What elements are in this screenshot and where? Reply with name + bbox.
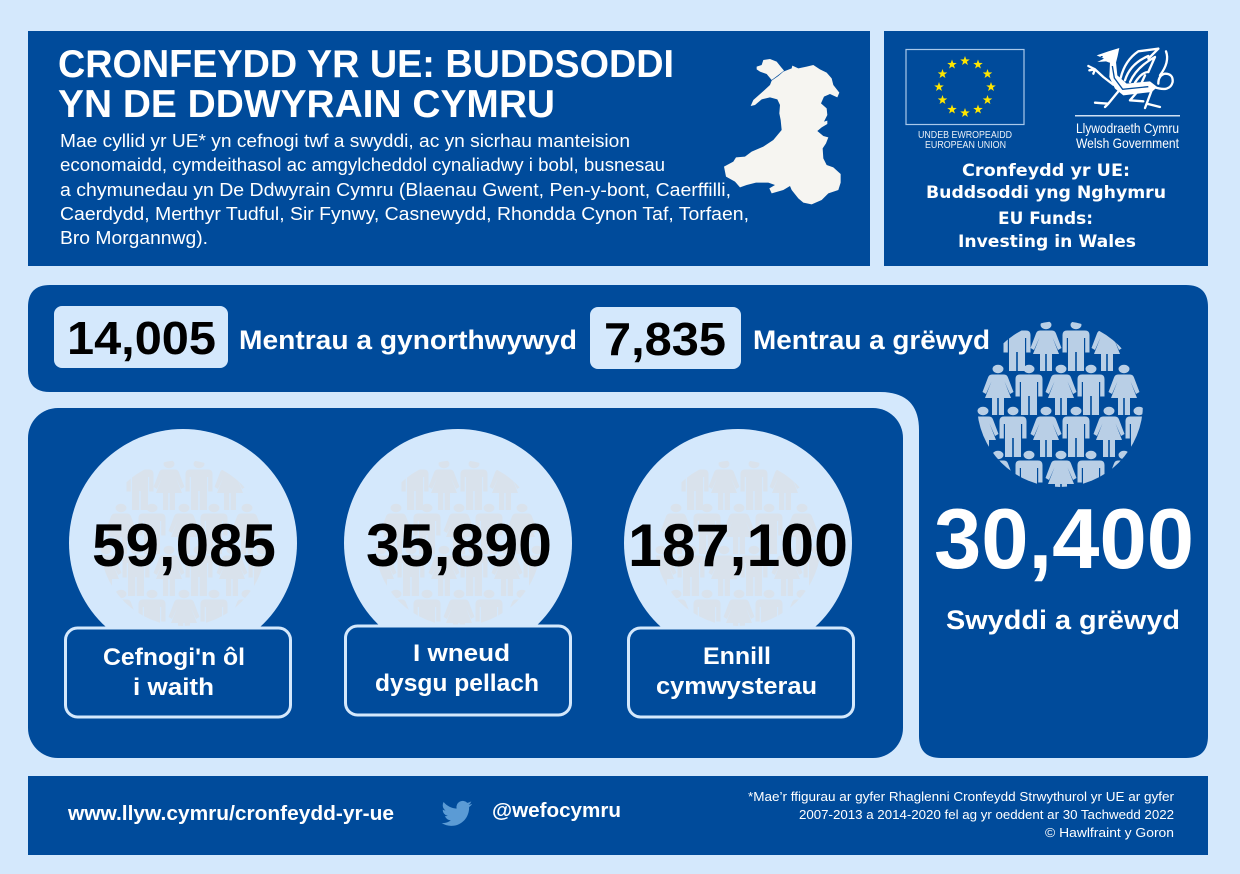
stat: jobs created: 30,400 — [934, 492, 1194, 587]
stat: jobs created — [934, 492, 1194, 635]
programme name: Buddsoddi yng Nghymru — [926, 183, 1166, 202]
Twitter handle: @wefocymru — [492, 800, 621, 822]
stat: gaining qualifications: Ennill — [703, 643, 771, 670]
website link: www.llyw.cymru/cronfeydd-yr-ue — [67, 803, 394, 825]
panel: header — [28, 31, 870, 266]
title — [58, 43, 674, 126]
title: CRONFEYDD YR UE: BUDDSODDI — [58, 43, 674, 86]
divider line and Welsh Government label: Llywodraeth Cymru — [1076, 120, 1179, 136]
divider line and Welsh Government label — [1075, 115, 1180, 151]
stat: further learning — [344, 429, 572, 715]
stat: enterprises supported — [54, 306, 577, 368]
panel: enterprises and jobs created — [28, 285, 1208, 758]
stat: back to work: i waith — [133, 674, 214, 701]
icon: Welsh dragon — [1088, 48, 1173, 108]
divider line and Welsh Government label: Welsh Government — [1076, 135, 1179, 151]
intro text: a chymunedau yn De Ddwyrain Cymru (Blaenau Gwent, Pen-y-bont, Caerffilli, — [60, 180, 731, 200]
programme name: Investing in Wales — [958, 232, 1136, 251]
stat: further learning: I wneud — [413, 640, 510, 667]
programme name — [926, 161, 1166, 251]
programme name: Cronfeydd yr UE: — [962, 161, 1130, 180]
stat: enterprises created: 7,835 — [604, 313, 726, 365]
footnote — [748, 789, 1175, 840]
intro text: Caerdydd, Merthyr Tudful, Sir Fynwy, Casnewydd, Rhondda Cynon Taf, Torfaen, — [60, 204, 749, 224]
panel: participants — [28, 408, 903, 758]
EU label — [918, 130, 1012, 151]
stat: enterprises supported: Mentrau a gynorthwywyd — [239, 325, 577, 355]
intro text — [60, 131, 749, 248]
icon: people circle — [978, 322, 1143, 487]
stat: jobs created: Swyddi a grëwyd — [946, 605, 1180, 635]
stat: back to work: 59,085 — [92, 512, 276, 579]
stat: gaining qualifications: cymwysterau — [656, 673, 817, 700]
stat: enterprises created — [590, 307, 990, 369]
EU label: EUROPEAN UNION — [925, 140, 1006, 151]
EU label: UNDEB EWROPEAIDD — [918, 130, 1012, 141]
intro text: Mae cyllid yr UE* yn cefnogi twf a swyddi, ac yn sicrhau manteision — [60, 131, 630, 151]
footnote: 2007-2013 a 2014-2020 fel ag yr oeddent ar 30 Tachwedd 2022 — [799, 807, 1174, 822]
panel: funding logos — [884, 31, 1208, 266]
footnote: *Mae’r ffigurau ar gyfer Rhaglenni Cronfeydd Strwythurol yr UE ar gyfer — [748, 789, 1175, 804]
stat: gaining qualifications: 187,100 — [628, 512, 848, 579]
icon: map of Wales — [724, 59, 841, 204]
icon: EU flag — [906, 50, 1024, 124]
stat: further learning: 35,890 — [366, 512, 552, 579]
intro text: economaidd, cymdeithasol ac amgylcheddol cynaliadwy i bobl, busnesau — [60, 155, 665, 175]
stat: back to work: Cefnogi'n ôl — [103, 644, 245, 671]
stat: enterprises created: Mentrau a grëwyd — [753, 325, 990, 355]
stat: further learning: dysgu pellach — [375, 670, 539, 697]
footnote: © Hawlfraint y Goron — [1045, 825, 1174, 840]
stat: gaining qualifications — [624, 429, 854, 717]
icon: Twitter bird — [442, 801, 472, 826]
stat: back to work — [66, 429, 297, 717]
intro text: Bro Morgannwg). — [60, 228, 208, 248]
title: YN DE DDWYRAIN CYMRU — [58, 83, 555, 126]
stat: enterprises supported: 14,005 — [67, 312, 216, 364]
panel: footer — [28, 776, 1208, 855]
programme name: EU Funds: — [998, 209, 1093, 228]
